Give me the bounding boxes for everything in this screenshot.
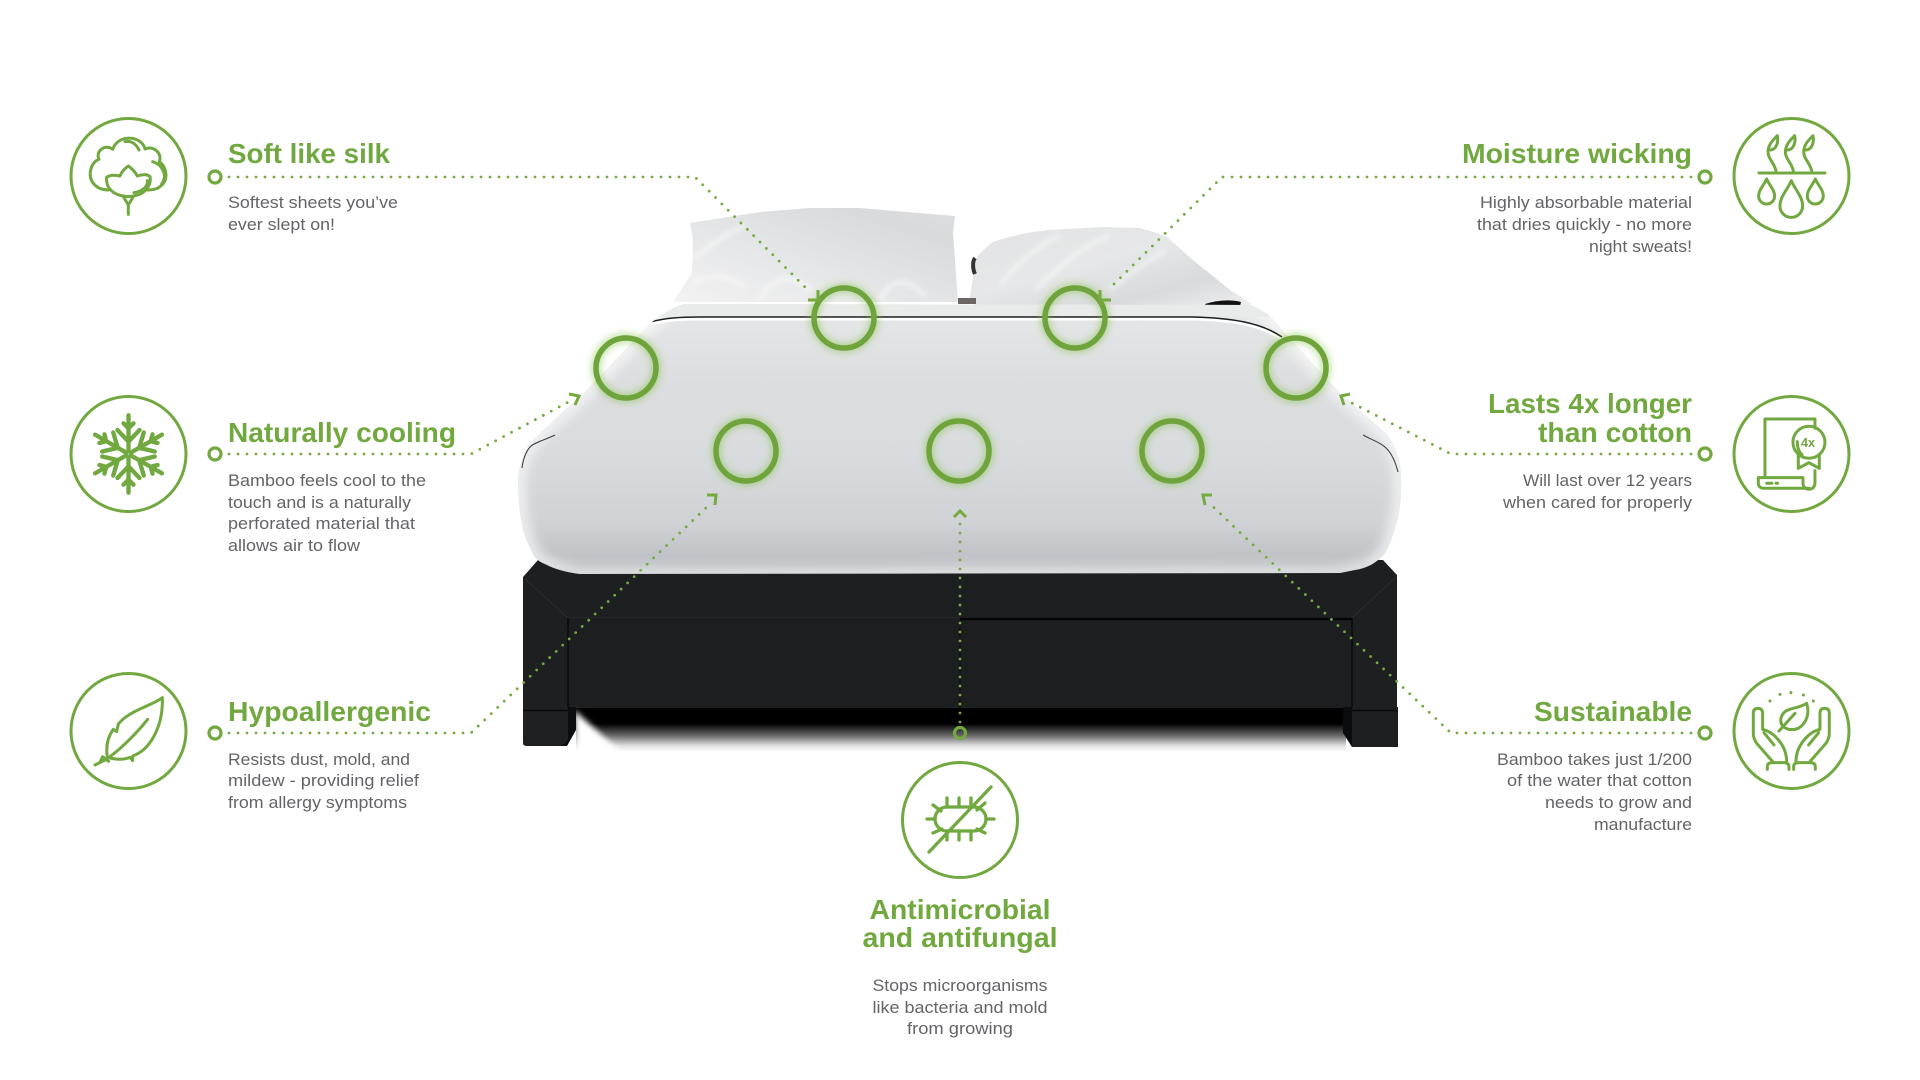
icon: snowflake [71,396,186,512]
text block: ever slept on! [228,215,335,234]
text block: night sweats! [1589,237,1692,256]
icon: certificate scroll with 4x badge: 4x [1801,436,1815,450]
text block [1502,471,1693,512]
text block: Resists dust, mold, and [228,750,410,769]
text block [1497,750,1692,834]
text block: allows air to flow [228,536,361,555]
text block: from growing [907,1019,1013,1038]
text block: Bamboo feels cool to the [228,471,426,490]
text block [1477,193,1692,256]
text block: Highly absorbable material [1480,193,1692,212]
heading: Hypoallergenic [228,696,431,727]
panel: Sustainable [1203,495,1849,834]
text block: Stops microorganisms [872,976,1048,995]
text block [228,193,398,234]
icon: certificate scroll with 4x badge [1734,396,1849,512]
text block [228,471,426,555]
bed illustration [518,208,1401,756]
text block [872,976,1048,1038]
panel: Soft like silk [71,118,818,300]
panel: Hypoallergenic [71,495,716,812]
heading [862,894,1058,953]
text block: from allergy symptoms [228,793,407,812]
heading: and antifungal [862,922,1058,953]
highlight rings on mattress [596,288,1326,481]
panel: Naturally cooling [71,394,579,555]
icon: cotton [71,118,186,234]
mattress [518,302,1401,574]
infographic canvas [70,117,1850,1038]
connector [1203,495,1711,739]
icon: hands holding leaf [1734,674,1849,788]
connector [1100,171,1711,300]
connector [209,495,716,739]
text block: when cared for properly [1502,493,1693,512]
text block: that dries quickly - no more [1477,215,1692,234]
panel: Antimicrobial and antifungal [862,511,1058,1038]
panel: Lasts 4x longer than cotton [1341,388,1849,512]
connector [209,394,579,460]
heading: Lasts 4x longer [1488,388,1692,419]
text block: Bamboo takes just 1/200 [1497,750,1692,769]
heading [1488,388,1692,448]
pillow right [970,227,1252,305]
text block: perforated material that [228,514,415,533]
icon: moisture steam and drops [1734,118,1849,234]
icon: crossed-out microbe [902,762,1018,878]
text block [228,750,419,812]
connector [1341,394,1711,460]
text block: manufacture [1594,815,1692,834]
text block: Softest sheets you’ve [228,193,398,212]
heading: Naturally cooling [228,417,456,448]
heading: Sustainable [1534,696,1692,727]
bed legs [523,707,1398,747]
text block: of the water that cotton [1507,771,1692,790]
bed frame [523,560,1397,710]
heading: Moisture wicking [1462,138,1692,169]
text block: like bacteria and mold [872,998,1048,1017]
pillow details [958,258,1241,306]
text block: needs to grow and [1545,793,1692,812]
floor shadow [574,708,1346,756]
text block: touch and is a naturally [228,493,412,512]
text block: Will last over 12 years [1523,471,1692,490]
heading: than cotton [1538,417,1692,448]
icon: feather [71,674,186,788]
connector [209,171,818,300]
connector [954,511,966,738]
pillow left [673,208,958,302]
heading: Soft like silk [228,138,390,169]
panel: Moisture wicking [1100,118,1849,300]
heading: Antimicrobial [870,894,1050,925]
text block: mildew - providing relief [228,771,419,790]
